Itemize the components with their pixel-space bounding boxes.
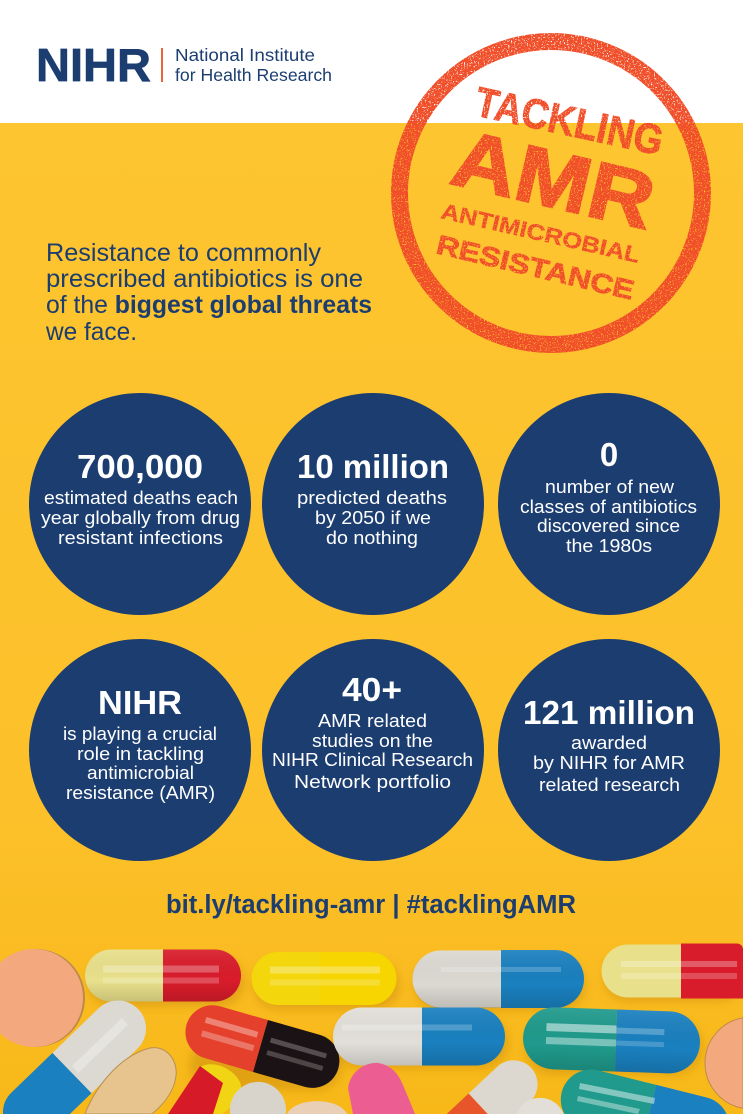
pill: grey white bottom — [230, 1082, 286, 1114]
capsule: yellow — [252, 952, 396, 1005]
capsule: pale yellow and red — [85, 950, 241, 1002]
capsule: white and orange tilted — [447, 1060, 538, 1114]
stat circle: 40+: 40+ — [342, 671, 402, 708]
stat circle: 10 million: predicted deaths — [297, 487, 447, 508]
stat circle: 10 million: by 2050 if we — [315, 507, 431, 528]
stat circle: 10 million: 10 million — [297, 448, 449, 485]
tablet: orange left — [0, 949, 85, 1047]
capsule: pale yellow and red right — [602, 944, 743, 998]
capsule: pink — [348, 1063, 415, 1114]
stamp: Tackling AMR — [400, 42, 702, 344]
stat circle: 700,000 — [29, 393, 251, 615]
stat circle: NIHR role: resistance (AMR) — [66, 782, 215, 803]
stat circle: NIHR role: role in tackling — [77, 743, 204, 764]
web link and hashtag: bit.ly/tackling-amr | #tacklingAMR — [166, 891, 576, 919]
stat circle: 10 million — [262, 393, 484, 615]
photo: pills and capsules — [0, 944, 743, 1114]
header band — [0, 0, 743, 123]
stat circle: 10 million: do nothing — [326, 527, 418, 548]
stat circle: 121 million: related research — [539, 774, 680, 795]
logo name — [175, 45, 332, 85]
intro text: prescribed antibiotics is one — [46, 265, 363, 293]
logo wordmark: NIHR — [36, 39, 151, 91]
stat circle: 700,000: year globally from drug — [41, 507, 240, 528]
stat circle: 0 new classes: the 1980s — [566, 535, 652, 556]
tablet: beige oval — [85, 1048, 176, 1114]
stat circle: 0 new classes: classes of antibiotics — [520, 496, 697, 517]
pill shadows — [88, 953, 743, 1090]
capsule: teal and blue upper — [522, 1006, 701, 1074]
stat circle: 700,000: resistant infections — [58, 527, 223, 548]
capsule: yellow and red bottom — [168, 1064, 241, 1114]
stat circle: NIHR role: antimicrobial — [87, 762, 194, 783]
stat circle: NIHR role: is playing a crucial — [63, 723, 217, 744]
tablet: orange right — [705, 1018, 743, 1108]
stat circle: 121 million: awarded — [571, 732, 647, 753]
capsule: teal and blue lower — [561, 1070, 727, 1114]
stamp word: resistance: RESISTANCE — [434, 230, 637, 306]
stat circle: 121 million — [498, 639, 720, 861]
stat circle: 40+: studies on the — [312, 730, 433, 751]
pill: white bottom — [516, 1098, 564, 1114]
capsule: white and blue middle — [333, 1008, 505, 1066]
stat circle: 0 new classes: discovered since — [537, 515, 680, 536]
stat circle: 700,000: estimated deaths each — [44, 487, 238, 508]
intro text: we face. — [45, 318, 137, 346]
logo name: for Health Research — [175, 65, 332, 85]
stat circle: NIHR role — [29, 639, 251, 861]
logo: NIHR National Institute for Health Research — [36, 39, 332, 91]
capsule: white and blue diagonal — [3, 1001, 146, 1114]
capsule: white and blue top — [412, 950, 584, 1008]
stat circle: 40+: AMR related — [318, 710, 427, 731]
stat circle: 0 new classes — [498, 393, 720, 615]
stamp word: AMR: AMR — [444, 113, 663, 246]
tablet: pale bottom — [287, 1101, 347, 1114]
stat circle: 121 million: by NIHR for AMR — [533, 752, 685, 773]
stat circle: NIHR role: NIHR — [98, 684, 182, 721]
stat circle: 0 new classes: number of new — [545, 476, 675, 497]
capsule: red and black — [179, 999, 346, 1094]
intro text — [45, 239, 372, 346]
stat circle: 700,000: 700,000 — [77, 448, 203, 485]
stamp ring — [400, 42, 702, 344]
intro text: Resistance to commonly — [46, 239, 322, 267]
intro text: of the biggest global threats — [46, 291, 372, 319]
stat circle: 40+: Network portfolio — [294, 771, 451, 792]
stat circle: 40+: NIHR Clinical Research — [272, 749, 473, 770]
stamp word: antimicrobial: ANTIMICROBIAL — [439, 198, 642, 268]
logo divider — [161, 48, 163, 82]
stat circle: 0 new classes: 0 — [600, 436, 618, 473]
stamp word: tackling: TACKLING — [471, 78, 668, 164]
stat circle: 121 million: 121 million — [523, 694, 695, 731]
logo name: National Institute — [175, 45, 315, 65]
stat circle: 40+ — [262, 639, 484, 861]
